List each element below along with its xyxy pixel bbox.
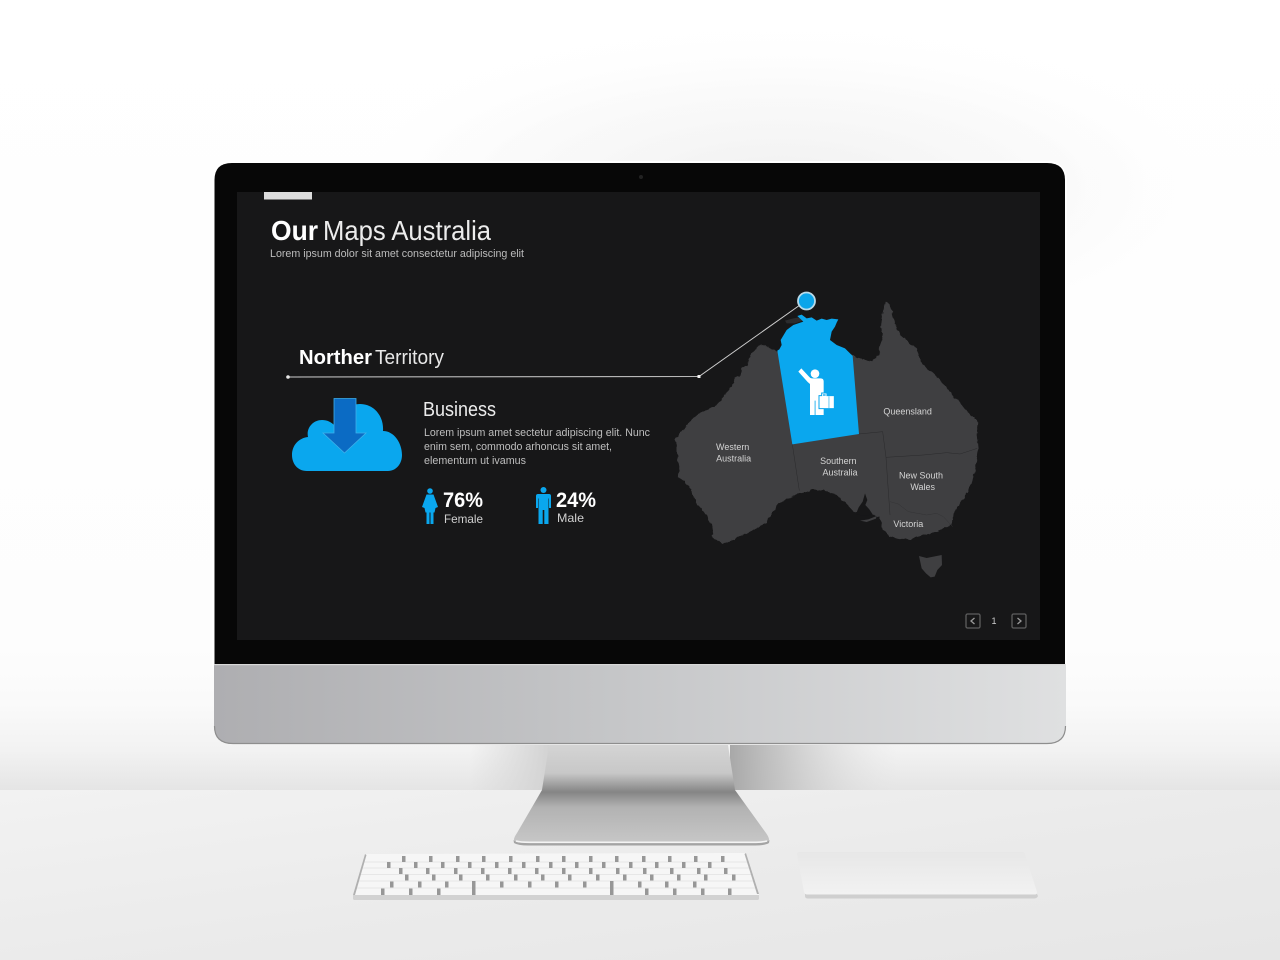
map state borders [792,432,977,527]
stat: 76% female [443,489,483,526]
body text: Lorem ipsum amet sectetur adipiscing elit. Nunc [424,427,650,439]
keyboard [353,853,759,900]
map labels: Southern [820,456,857,466]
map island: Melville [785,317,803,323]
map labels: Wales [910,482,935,492]
monitor stand [514,745,770,846]
pagination [966,614,1026,628]
section heading: Norther Territory: Territory [375,346,445,369]
previous button [966,614,980,628]
map labels: Australia [716,454,751,464]
icon: traveller with suitcase [798,368,834,415]
stat: 76% female: 76% [443,489,483,512]
icon: female figure [422,488,438,524]
slide screen [237,192,1040,640]
map labels: Australia [823,468,857,478]
stat: 24% male: 24% [556,489,596,512]
subtitle: Lorem ipsum dolor sit amet consectetur adipiscing elit [270,248,524,260]
section heading: Norther Territory: Norther [299,346,372,369]
map mainland [674,302,978,543]
stat: 24% male [556,489,596,525]
map labels: Victoria [893,519,923,529]
map labels: Queensland [883,407,932,417]
body text: enim sem, commodo arhoncus sit amet, [424,441,612,453]
map: Australia [674,302,978,577]
map Northern Territory, highlighted [777,315,859,444]
stat: 24% male: Male [557,511,584,525]
map Spencer Gulf and Kangaroo Island [856,493,877,522]
body text: elementum ut ivamus [424,455,526,467]
callout leader line [286,292,815,379]
monitor body [212,161,1067,744]
page number: 1 [991,616,997,626]
heading: Business: Business [423,399,496,421]
icon: male figure [536,487,551,524]
icon: cloud with download arrow [292,398,402,471]
accent bar [264,192,312,200]
map labels [716,407,943,529]
next button [1012,614,1026,628]
body text [424,427,650,467]
title: Our [271,215,318,246]
map labels: New South [899,470,943,480]
title: Maps Australia [323,215,491,246]
map labels: Western [716,442,749,452]
stat: 76% female: Female [444,512,483,526]
trackpad [797,852,1038,898]
map Tasmania [919,555,942,577]
